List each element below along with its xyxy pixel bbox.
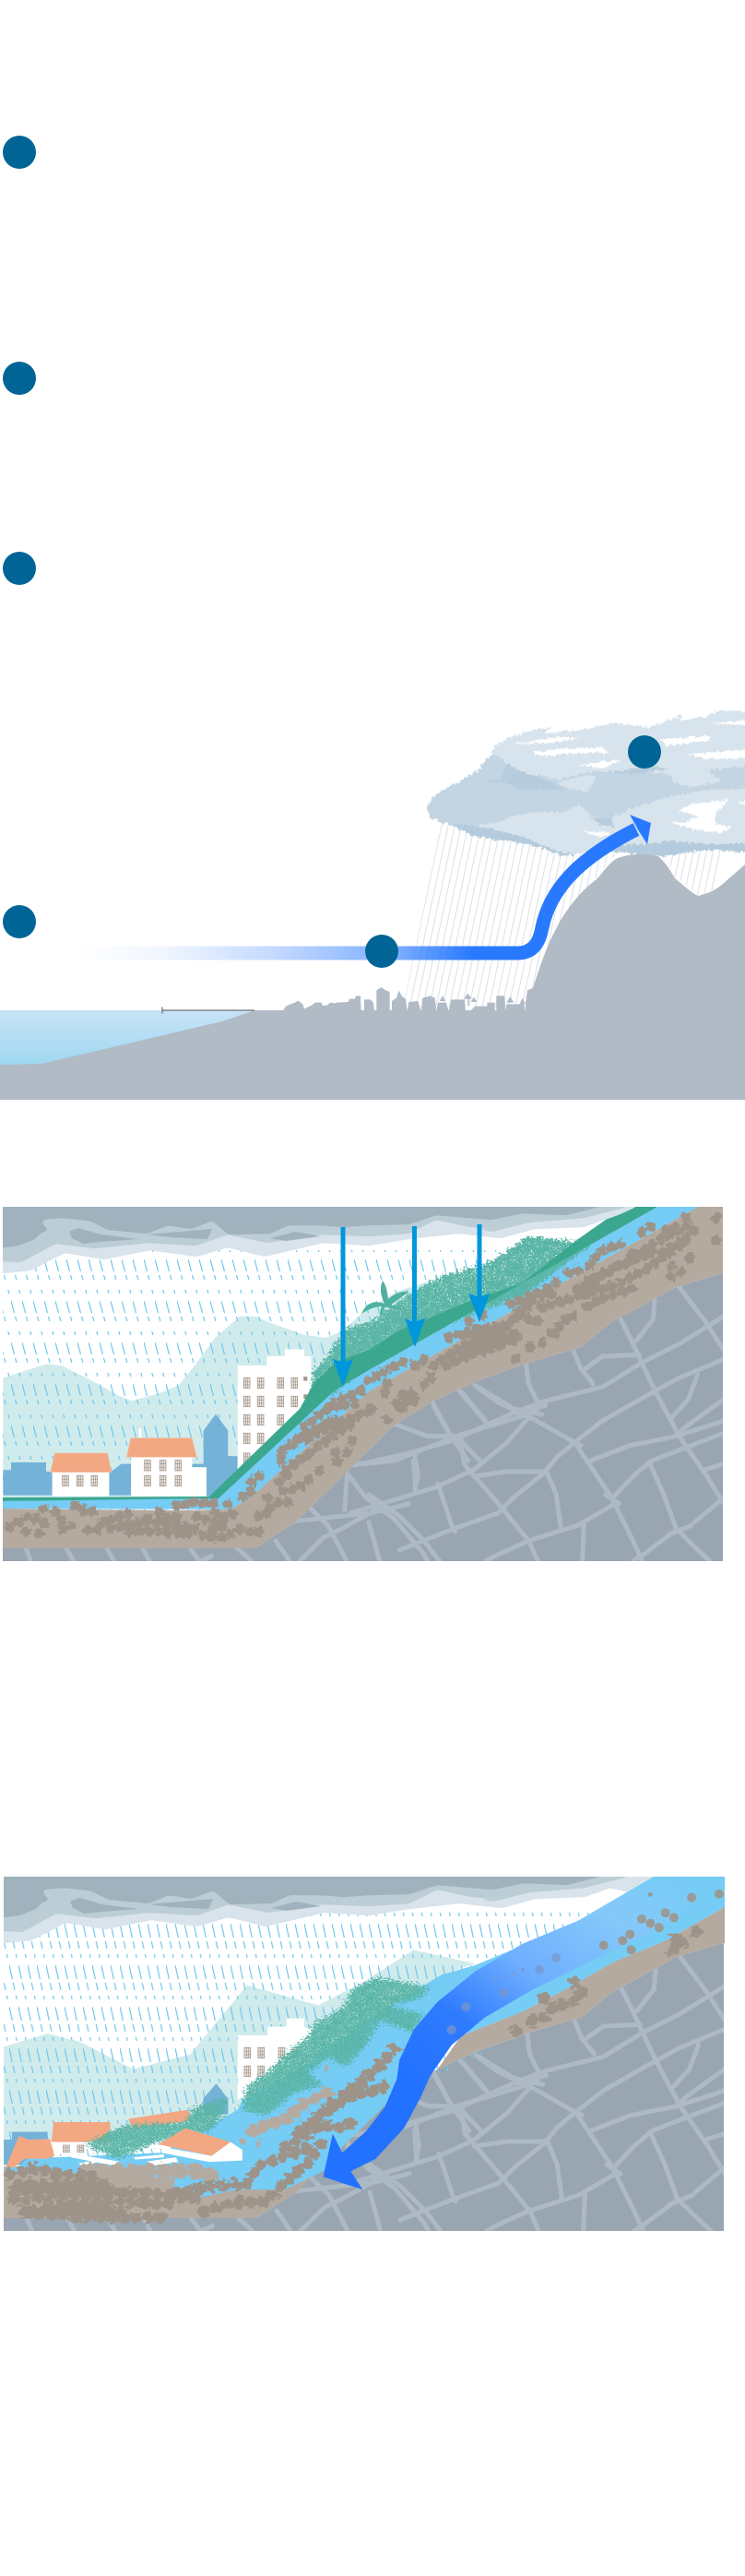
hills bbox=[3, 1281, 431, 1497]
marker 5 bbox=[365, 935, 398, 968]
rock piles bbox=[9, 1931, 697, 2217]
debris planks bbox=[66, 2153, 178, 2166]
collapsed house left bbox=[6, 2136, 57, 2167]
blue tower bbox=[203, 2083, 228, 2115]
small house with orange roof bbox=[51, 1453, 112, 1497]
rain bbox=[3, 1250, 630, 1518]
rain streaks over the slope bbox=[403, 823, 724, 1008]
flood water bbox=[4, 1877, 725, 2198]
cloud light patch bbox=[556, 770, 722, 792]
arrow head bbox=[630, 815, 651, 844]
flow arrow bbox=[323, 1889, 673, 2190]
rocks in soil, upper slope bbox=[369, 1218, 716, 1420]
bedrock with cracks bbox=[3, 1273, 724, 1561]
cloud body bbox=[427, 710, 745, 856]
cloud mid shading bbox=[427, 754, 745, 826]
light boulders bbox=[86, 2069, 333, 2185]
rain arrow 1 bbox=[333, 1227, 353, 1387]
blue block left bbox=[4, 2132, 54, 2165]
large house with orange roof bbox=[126, 1428, 207, 1497]
submerged rocks bbox=[452, 1958, 556, 2030]
reference tick line bbox=[162, 1008, 254, 1013]
marker 3 bbox=[3, 552, 36, 585]
vegetation light bbox=[311, 1236, 590, 1398]
rain bbox=[4, 1910, 627, 2168]
arrow curve bbox=[517, 829, 636, 953]
cloud dark streaks bbox=[458, 763, 670, 828]
tall white building bbox=[238, 1349, 312, 1470]
water layer bbox=[3, 1207, 698, 1509]
palm tree bbox=[361, 1281, 408, 1318]
city skyline bbox=[283, 982, 539, 1011]
blue background buildings bbox=[3, 1414, 238, 1497]
mountain and ground bbox=[0, 854, 745, 1100]
cloud white highlights top bbox=[514, 720, 745, 769]
hills bbox=[4, 1950, 476, 2141]
vegetation clumps bbox=[86, 1977, 431, 2159]
rain arrow 2 bbox=[405, 1226, 425, 1347]
marker 2 bbox=[3, 362, 36, 395]
cloud bbox=[427, 710, 745, 856]
soil layer bbox=[3, 1207, 723, 1548]
rocks in soil, lower slope bbox=[9, 1390, 369, 1538]
marker 1 bbox=[3, 136, 36, 169]
palm trees bbox=[440, 982, 539, 1010]
panel: saturated slope with infiltrating rain bbox=[0, 1195, 724, 1561]
tilted roof back bbox=[128, 2110, 193, 2129]
cloud white highlights bottom bbox=[584, 799, 745, 837]
storm clouds bbox=[0, 1865, 637, 1943]
vegetation dark band bbox=[3, 1207, 657, 1501]
rocks carried in the flow bbox=[604, 1894, 719, 1951]
arrow tail gradient bbox=[77, 947, 518, 960]
marker 4 bbox=[3, 905, 36, 938]
rain arrow 3 bbox=[468, 1224, 490, 1322]
panel: debris flow bbox=[0, 1865, 725, 2231]
tilted house bbox=[159, 2129, 242, 2162]
house centre left bbox=[52, 2122, 111, 2154]
sea bbox=[0, 1010, 258, 1066]
marker 6 bbox=[628, 735, 661, 769]
air flow arrow bbox=[77, 815, 651, 960]
tall building bbox=[238, 2019, 312, 2101]
panel: coastal cross-section with orographic lift bbox=[0, 710, 745, 1100]
cloud base bbox=[452, 824, 745, 856]
bedrock with cracks bbox=[4, 1943, 725, 2231]
storm clouds upper tip bbox=[610, 1877, 653, 1891]
soil bbox=[4, 1907, 725, 2218]
storm clouds bbox=[3, 1207, 635, 1273]
